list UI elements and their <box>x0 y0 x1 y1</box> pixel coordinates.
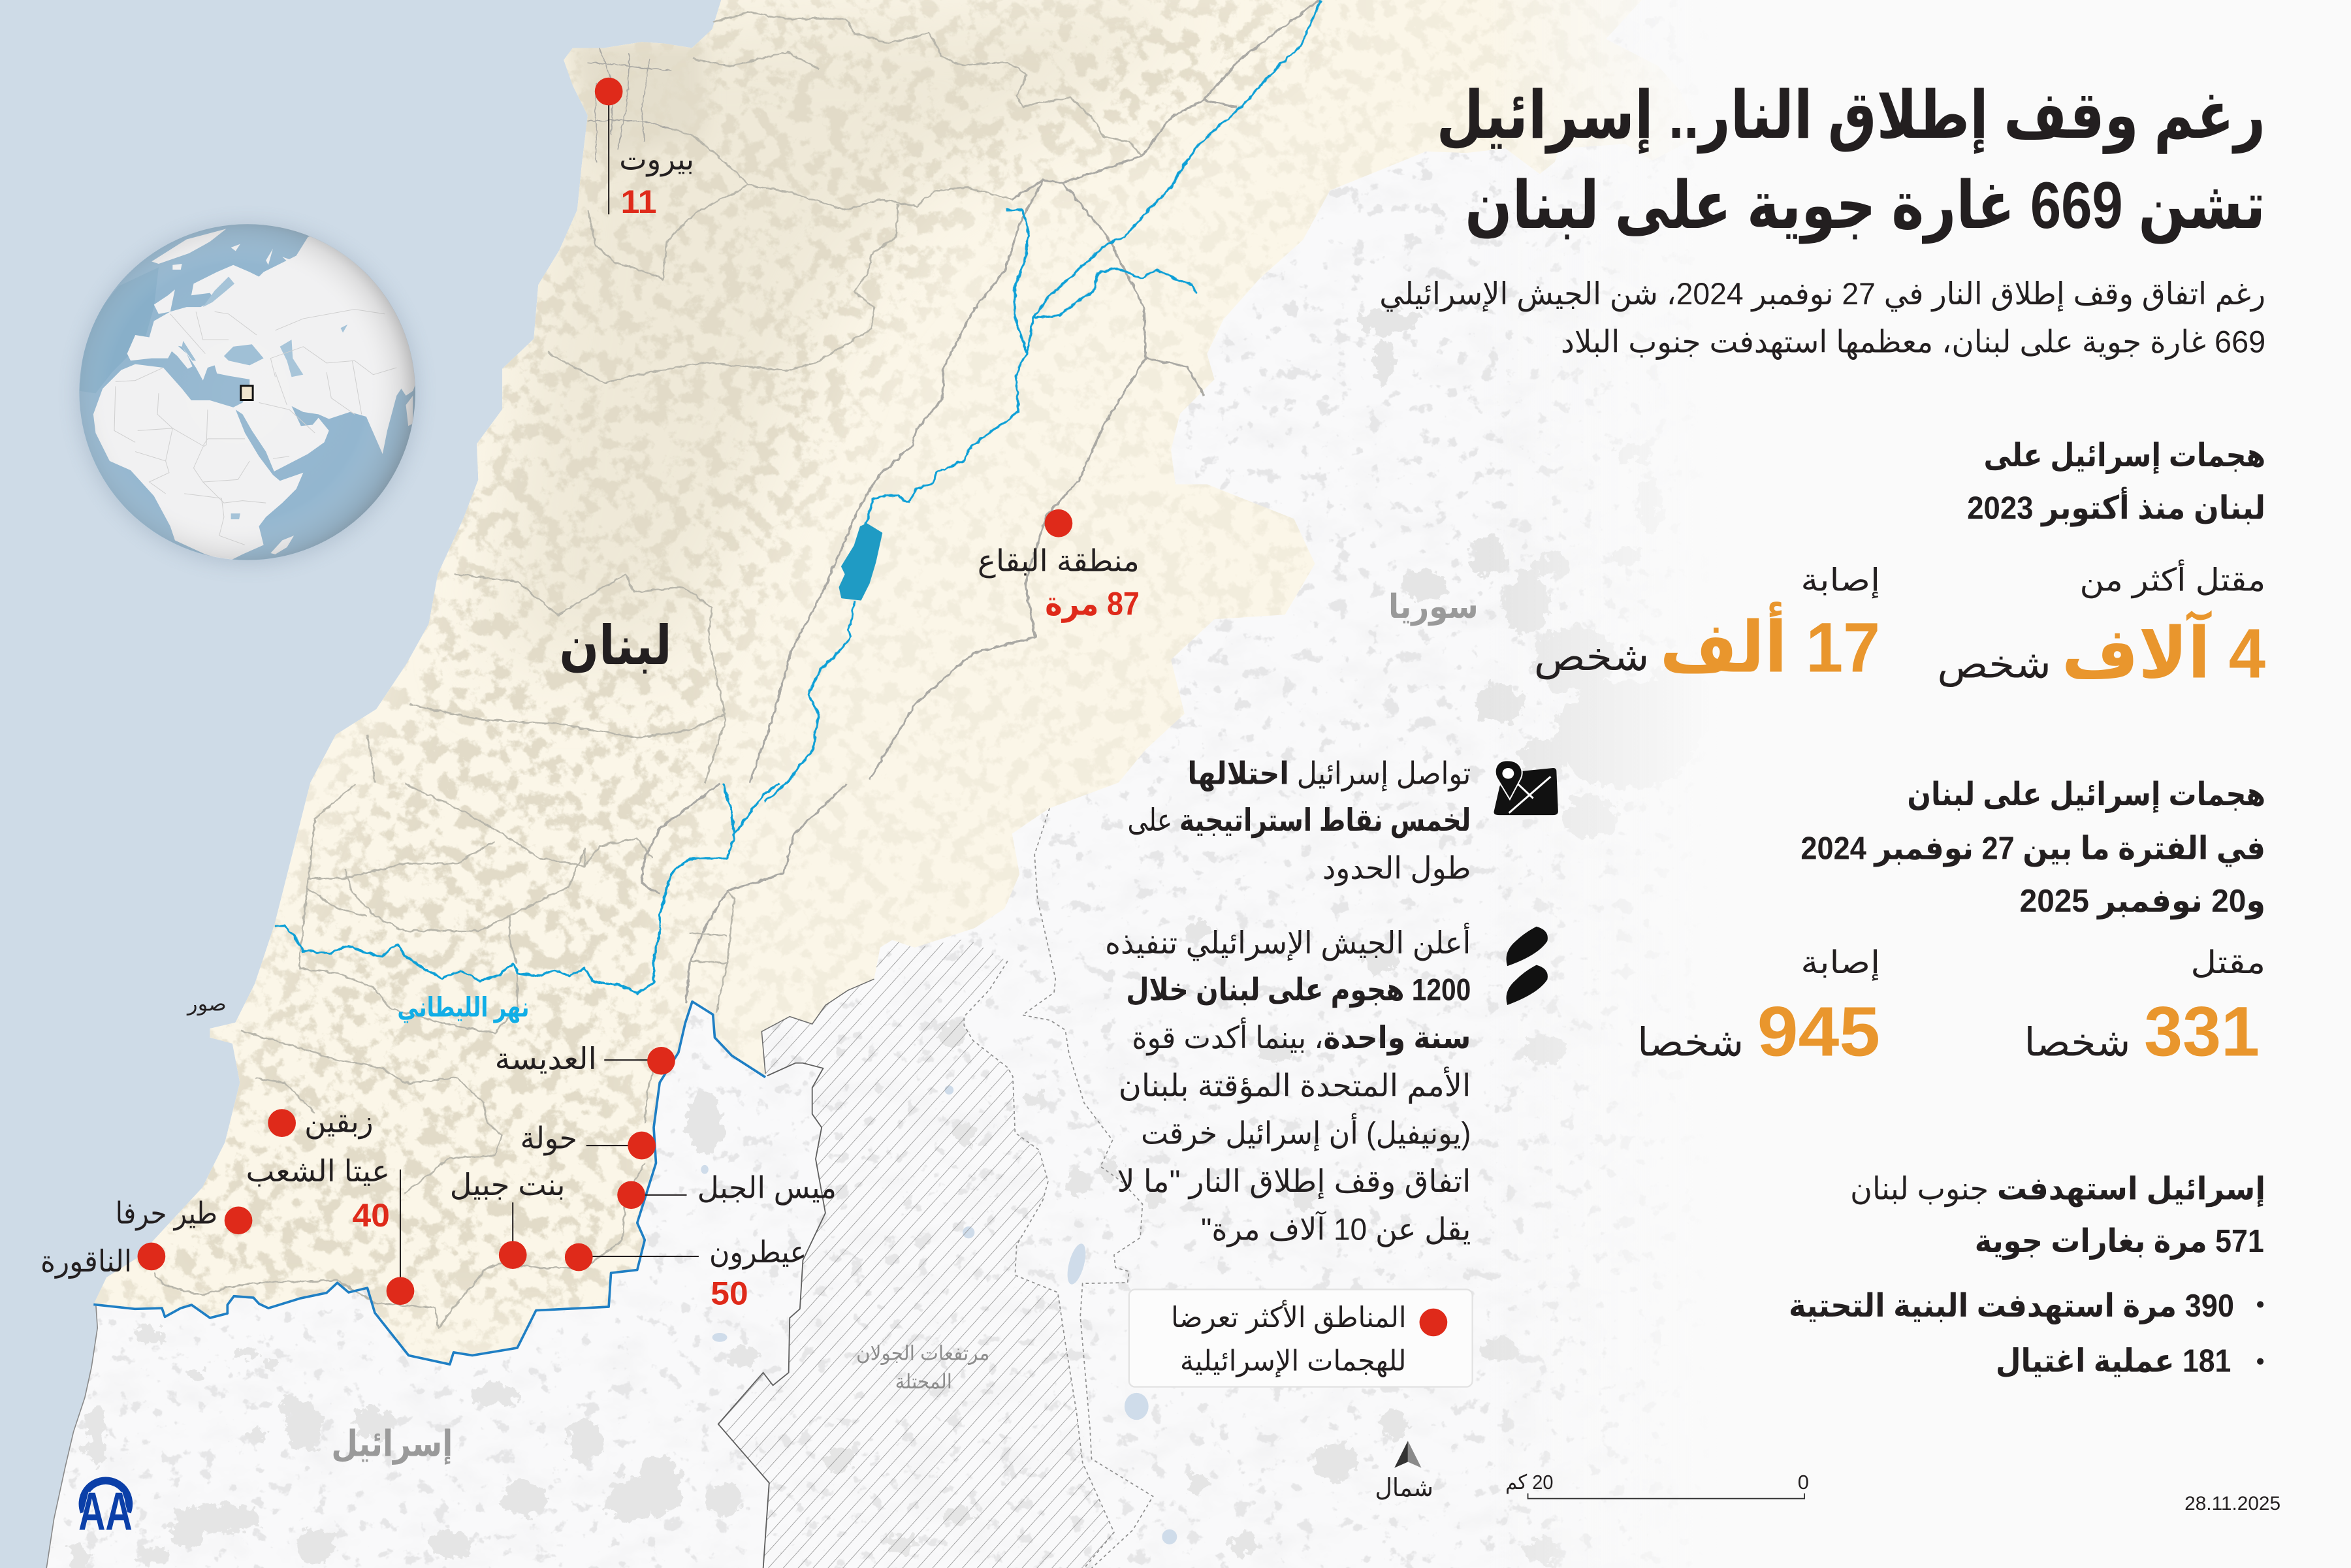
label: Lebanon: لبنان <box>559 615 672 676</box>
globe locator <box>76 223 420 566</box>
date: 28.11.2025 <box>2184 1493 2280 1514</box>
locator square <box>241 386 253 400</box>
heading: attacks between 27 Nov 2024 and 20 Nov 2025: هجمات إسرائيل على لبنان <box>1907 776 2265 813</box>
heading: attacks between 27 Nov 2024 and 20 Nov 2025: و20 نوفمبر 2025 <box>2020 883 2265 920</box>
text block: occupation of five points <box>1128 756 1471 886</box>
sea <box>0 0 721 1568</box>
title <box>1436 79 2265 244</box>
label: Aitaroun: 50 <box>711 1274 748 1311</box>
stat: killed more than 4 thousand: مقتل أكثر من <box>2079 560 2265 599</box>
Litani river and lake <box>275 0 1321 993</box>
scale bar: 0 <box>1798 1471 1809 1494</box>
label: Bint Jbeil <box>450 1168 566 1269</box>
occupied Golan Heights hatched area <box>718 808 1153 1568</box>
bullet list: 181 عملية اغتيال <box>1996 1343 2231 1379</box>
label: Tayr Harfa: طير حرفا <box>116 1196 217 1231</box>
label: Bekaa: 87 مرة <box>1045 584 1140 623</box>
label: Golan Heights: المحتلة <box>895 1370 952 1393</box>
label: Litani River: نهر الليطاني <box>397 993 529 1024</box>
text block: occupation of five points: طول الحدود <box>1322 850 1471 886</box>
label: Tyre: صور <box>186 992 227 1016</box>
icon: two shells <box>1506 927 1548 1005</box>
label: Beirut <box>595 78 694 220</box>
text block: 10 thousand violations: (يونيفيل) أن إسرائيل خرقت <box>1141 1113 1471 1152</box>
heading: attacks between 27 Nov 2024 and 20 Nov 2025: في الفترة ما بين 27 نوفمبر 2024 <box>1800 831 2265 868</box>
border of Lebanon with Israel <box>93 1002 765 1364</box>
legend <box>1129 1289 1473 1387</box>
stat: 17 thousand injured: إصابة <box>1800 563 1880 599</box>
label: Golan Heights: مرتفعات الجولان <box>856 1341 989 1365</box>
text block: south Lebanon targets: 571 مرة بغارات جوية <box>1975 1223 2264 1260</box>
text block: 10 thousand violations: الأمم المتحدة المؤقتة بلبنان <box>1119 1066 1471 1104</box>
stat: 945 injured <box>1637 945 1880 1070</box>
text block: south Lebanon targets: إسرائيل استهدفت جنوب لبنان <box>1850 1172 2265 1208</box>
text block: 10 thousand violations: يقل عن 10 آلاف مرة" <box>1201 1211 1471 1248</box>
label: Beirut: بيروت <box>619 142 694 177</box>
text block: occupation of five points: تواصل إسرائيل احتلالها <box>1187 756 1471 792</box>
heading: attacks since October 2023: لبنان منذ أكتوبر 2023 <box>1967 487 2265 527</box>
stat: 331 killed: شخصا <box>2024 1020 2131 1064</box>
text block: south Lebanon targets <box>1789 1172 2265 1379</box>
label: Mays al-Jabal <box>617 1170 837 1209</box>
stat: killed more than 4 thousand <box>1937 560 2265 693</box>
icon: map with pin <box>1494 760 1558 815</box>
heading: attacks since October 2023: هجمات إسرائيل على <box>1983 438 2265 474</box>
stat: 331 killed: مقتل <box>2190 945 2265 980</box>
stat: 17 thousand injured <box>1534 563 1880 687</box>
text block: 10 thousand violations: اتفاق وقف إطلاق النار "ما لا <box>1117 1164 1471 1200</box>
label: Naqoura: الناقورة <box>40 1244 132 1279</box>
stat: 945 injured: شخصا <box>1637 1020 1744 1064</box>
stat: 331 killed <box>2024 945 2265 1070</box>
coast line of Israel <box>46 1306 97 1568</box>
north arrow: شمال <box>1375 1475 1433 1502</box>
stat: 945 injured: إصابة <box>1800 945 1880 981</box>
district boundaries and roads north <box>367 0 1319 782</box>
logo: Anadolu Agency: AA <box>78 1480 133 1541</box>
label: Golan Heights <box>856 1341 989 1393</box>
label: Mays al-Jabal: ميس الجبل <box>697 1170 837 1205</box>
small water bodies <box>701 1085 1177 1544</box>
scale bar <box>1505 1471 1809 1499</box>
label: Adaisseh <box>495 1042 675 1076</box>
scale bar: 20 كم <box>1505 1471 1554 1494</box>
stat: 945 injured: 945 <box>1757 991 1880 1070</box>
label: Bekaa: منطقة البقاع <box>978 544 1140 579</box>
globe borders <box>114 310 396 545</box>
text block: 10 thousand violations: سنة واحدة، بينما أكدت قوة <box>1132 1017 1471 1056</box>
right side fade <box>1484 0 2351 1568</box>
label: Zibqin <box>268 1104 374 1140</box>
label: Houla <box>520 1121 656 1159</box>
label: Zibqin: زبقين <box>304 1104 374 1140</box>
text block: 10 thousand violations: أعلن الجيش الإسرائيلي تنفيذه <box>1105 923 1471 961</box>
label: Aita al-Shaab: عيتا الشعب <box>246 1154 390 1188</box>
heading: attacks since October 2023 <box>1967 438 2265 527</box>
label: Syria: سوريا <box>1388 588 1479 626</box>
stat: 17 thousand injured: 17 ألف <box>1660 602 1880 687</box>
label: Adaisseh: العديسة <box>495 1042 597 1076</box>
text block: 10 thousand violations <box>1105 923 1471 1248</box>
label: Aitaroun: عيطرون <box>709 1235 807 1270</box>
text block: occupation of five points: لخمس نقاط استراتيجية على <box>1128 803 1471 839</box>
intro paragraph: رغم اتفاق وقف إطلاق النار في 27 نوفمبر 2024، شن الجيش الإسرائيلي <box>1379 276 2265 312</box>
intro paragraph: 669 غارة جوية على لبنان، معظمها استهدفت جنوب البلاد <box>1561 325 2265 360</box>
stat: 331 killed: 331 <box>2144 991 2260 1070</box>
logo: Anadolu Agency <box>78 1480 133 1541</box>
title: تشن 669 غارة جوية على لبنان <box>1465 169 2265 244</box>
stat: killed more than 4 thousand: 4 آلاف <box>2062 610 2265 693</box>
intro paragraph <box>1379 276 2265 360</box>
text block: 10 thousand violations: 1200 هجوم على لبنان خلال <box>1126 972 1471 1008</box>
bullet list: 390 مرة استهدفت البنية التحتية <box>1789 1288 2234 1325</box>
label: Beirut: 11 <box>621 183 657 220</box>
map base <box>0 0 1651 1568</box>
label: Aitaroun <box>565 1235 807 1311</box>
bullet list <box>1789 1288 2263 1379</box>
label: Houla: حولة <box>520 1121 577 1157</box>
stat: killed more than 4 thousand: شخص <box>1937 643 2051 688</box>
legend: المناطق الأكثر تعرضا <box>1171 1300 1407 1334</box>
label: Aita al-Shaab <box>246 1154 414 1305</box>
district boundaries south <box>153 784 847 1328</box>
built-up patches <box>67 309 1716 1568</box>
stat: 17 thousand injured: شخص <box>1534 635 1650 680</box>
label: Bint Jbeil: بنت جبيل <box>450 1168 566 1202</box>
legend: للهجمات الإسرائيلية <box>1180 1345 1407 1377</box>
label: Bekaa <box>978 509 1140 623</box>
heading: attacks between 27 Nov 2024 and 20 Nov 2025 <box>1800 776 2265 920</box>
north arrow <box>1375 1441 1433 1502</box>
label: Israel: إسرائيل <box>331 1423 453 1465</box>
label: Aita al-Shaab: 40 <box>353 1196 390 1234</box>
